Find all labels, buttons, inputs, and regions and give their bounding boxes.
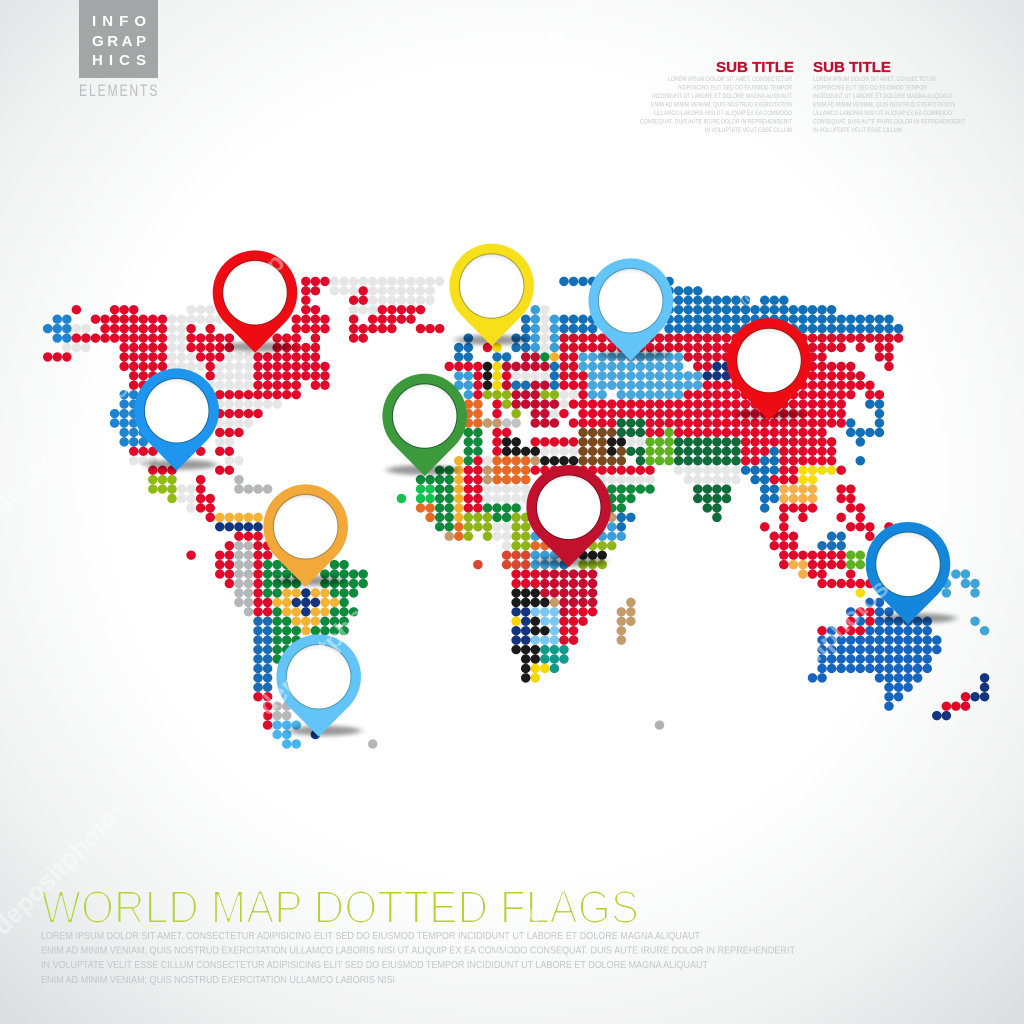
text column: sub title left: ADIPISICING ELIT SED DO EIUSMOD TEMPOR	[678, 84, 792, 92]
pin: red, Asia	[727, 318, 811, 420]
logo: infographics elements: HICS	[92, 52, 146, 69]
text column: sub title right: ENIM AD MINIM VENIAM, QUIS NOSTRUD EXERCITATION	[813, 102, 955, 108]
pin: crimson, East Africa	[526, 465, 611, 567]
pin: light blue, South America south	[276, 634, 361, 737]
logo: infographics elements: INFO	[92, 13, 146, 30]
map region: South America	[191, 517, 374, 744]
logo: infographics elements	[79, 0, 158, 101]
dotted world map	[48, 281, 986, 744]
watermarks: ©depositphotos	[733, 573, 894, 734]
watermarks: ©depositphotos	[733, 153, 894, 314]
text column: sub title left: LOREM IPSUM DOLOR SIT AMET, CONSECTETUR	[668, 76, 792, 83]
body text block: ENIM AD MINIM VENIAM, QUIS NOSTRUD EXERCITATION ULLAMCO LABORIS NISI	[41, 975, 395, 986]
pin: red, North America	[213, 250, 297, 353]
text column: sub title right: CONSEQUAT. DUIS AUTE IRURE DOLOR IN REPREHENDERIT	[813, 118, 965, 126]
watermarks: ©depositphotos	[223, 153, 384, 314]
pin: orange, South America north	[263, 484, 348, 587]
logo: infographics elements: GRAP	[92, 33, 146, 50]
text column: sub title left: INCIDIDUNT UT LABORE ET DOLORE MAGNA ALIQUAUT	[652, 93, 792, 100]
text column: sub title left: ULLAMCO LABORIS NISI UT ALIQUIP EX EA COMMODO	[654, 110, 792, 117]
body text block: ENIM AD MINIM VENIAM, QUIS NOSTRUD EXERCITATION ULLAMCO LABORIS NISI UT ALIQUIP EX EA COMMODO CONSEQUAT. DUIS AUTE IRURE DOLOR IN REPREHENDERIT	[41, 946, 795, 956]
map region: Asia	[564, 281, 899, 517]
text column: sub title right	[813, 59, 965, 134]
text column: sub title left: IN VOLUPTATE VELIT ESSE CILLUM	[705, 127, 792, 134]
watermarks: ©depositphotos	[483, 803, 644, 964]
pin: blue, Australia	[866, 522, 956, 624]
text column: sub title left: SUB TITLE	[716, 59, 794, 76]
text column: sub title left	[640, 59, 794, 134]
pin: green, West Africa	[382, 374, 467, 476]
watermarks: ©depositphotos	[238, 573, 399, 734]
title: WORLD MAP DOTTED FLAGS	[41, 881, 639, 933]
map region: South-East Asia and Oceania	[765, 517, 986, 716]
text column: sub title right: SUB TITLE	[813, 59, 891, 76]
pin: blue, United States	[134, 368, 219, 471]
pin: light blue, Central Asia	[588, 258, 673, 361]
text column: sub title left: ENIM AD MINIM VENIAM, QUIS NOSTRUD EXERCITATION	[651, 102, 792, 108]
map region: Europe and Africa	[401, 310, 660, 725]
text column: sub title right: ADIPISICING ELIT SED DO EIUSMOD TEMPOR	[813, 84, 927, 92]
text column: sub title left: CONSEQUAT. DUIS AUTE IRURE DOLOR IN REPREHENDERIT	[640, 118, 792, 126]
pin: yellow, Europe	[449, 244, 534, 346]
body text block	[41, 931, 795, 986]
text column: sub title right: ULLAMCO LABORIS NISI UT ALIQUIP EX EA COMMODO	[813, 110, 952, 117]
body text block: IN VOLUPTATE VELIT ESSE CILLUM CONSECTETUR ADIPISICING ELIT SED DO EIUSMOD TEMPOR INCIDIDUNT UT LABORE ET DOLORE MAGNA ALIQUAUT	[41, 960, 708, 971]
body text block: LOREM IPSUM DOLOR SIT AMET, CONSECTETUR ADIPISICING ELIT SED DO EIUSMOD TEMPOR INCIDIDUNT UT LABORE ET DOLORE MAGNA ALIQUAUT	[41, 931, 700, 942]
text column: sub title right: INCIDIDUNT UT LABORE ET DOLORE MAGNA ALIQUAUT	[813, 93, 953, 100]
map region: North America	[48, 281, 326, 517]
logo: infographics elements: ELEMENTS	[79, 82, 158, 101]
map region: Greenland and Iceland	[334, 281, 441, 338]
text column: sub title right: LOREM IPSUM DOLOR SIT AMET, CONSECTETUR	[813, 76, 936, 83]
text column: sub title right: IN VOLUPTATE VELIT ESSE CILLUM	[813, 127, 902, 134]
